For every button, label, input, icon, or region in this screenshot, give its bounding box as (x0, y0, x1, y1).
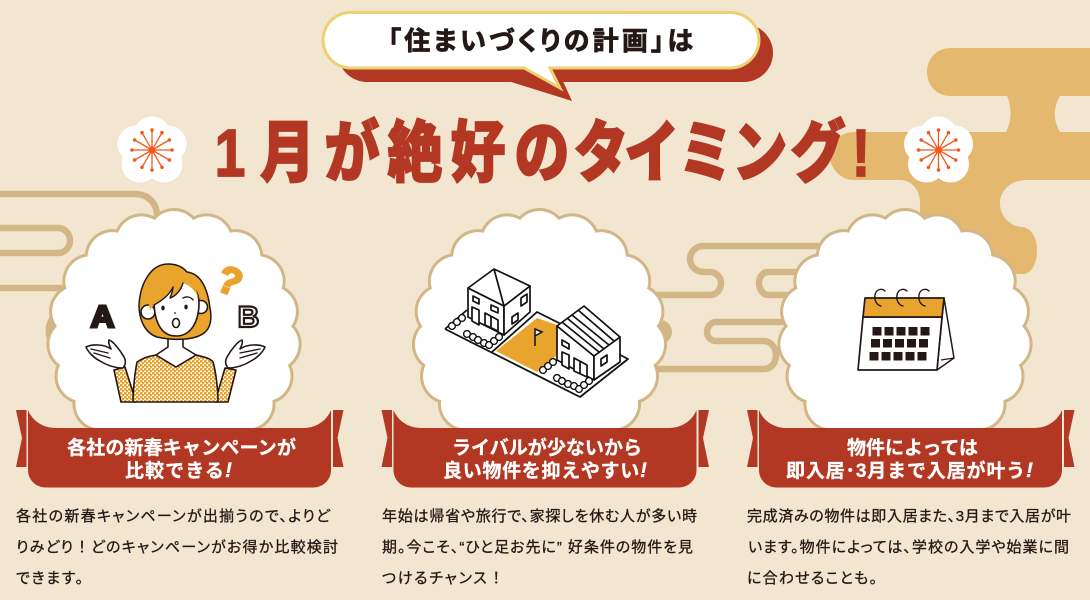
text block 2 (382, 507, 697, 587)
icon: plum blossom right (904, 116, 973, 182)
icon: desk calendar (858, 289, 954, 370)
bubble shadow (338, 24, 773, 101)
letter B: B (238, 301, 259, 334)
panel: few rivals (412, 208, 667, 463)
ribbon 3: 物件によっては (847, 437, 978, 459)
text block 1: りみどり ！ どのキャンペーンがお得か比較検討 (16, 539, 338, 556)
illustration: woman comparing A and B (86, 258, 265, 402)
text block 1 (16, 508, 338, 587)
ribbon 3 (747, 410, 1074, 488)
ribbon 3: 即入居･3月まで入居が叶う! (786, 459, 1033, 482)
text block 2: 期。今こそ、“ひと足お先に” 好条件の物件を見 (382, 539, 693, 556)
text block 2: つけるチャンス ！ (382, 570, 500, 587)
panel: move-in timing (777, 208, 1033, 463)
text block 3: に合わせることも。 (747, 570, 877, 587)
text block 3: います。物件によっては、学校の入学や始業に間 (748, 539, 1069, 556)
ribbon 1 (16, 410, 344, 488)
ribbon 2: ライバルが少ないから (452, 436, 642, 459)
text block 3: 完成済みの物件は即入居また、3月まで入居が叶 (747, 508, 1071, 525)
tan cloud lines left (0, 194, 157, 350)
scalloped circle (412, 208, 667, 463)
speech bubble (323, 12, 773, 101)
text block 1: できます。 (16, 570, 83, 587)
hedges (449, 315, 592, 392)
bubble body (323, 12, 759, 88)
letter A: A (91, 299, 114, 334)
text block 3 (747, 508, 1071, 587)
vacant lot (496, 318, 557, 372)
ribbon 1: 各社の新春キャンペーンが (67, 436, 296, 459)
text block 2: 年始は帰省や旅行で、家探しを休む人が多い時 (382, 507, 697, 525)
main title: 1月が絶好のタイミング! (215, 116, 870, 190)
right house (557, 306, 620, 380)
icon: plum blossom left (118, 116, 186, 182)
bubble text: 「住まいづくりの計画」は (388, 26, 693, 56)
panel: compare campaigns (46, 208, 302, 463)
ribbon 2 (382, 410, 709, 488)
flag (535, 329, 542, 346)
ribbon 2: 良い物件を抑えやすい! (443, 459, 647, 482)
gold cloud motif top right (830, 48, 1090, 274)
question mark: ? (211, 258, 248, 306)
tan cloud lines middle right (640, 246, 860, 369)
ribbon 1: 比較できる! (125, 459, 232, 482)
text block 1: 各社の新春キャンペーンが出揃うので、よりど (16, 508, 331, 525)
scalloped circle (777, 208, 1033, 463)
illustration: houses with vacant lot (445, 269, 628, 397)
scalloped circle (46, 208, 302, 463)
left house (468, 269, 530, 335)
